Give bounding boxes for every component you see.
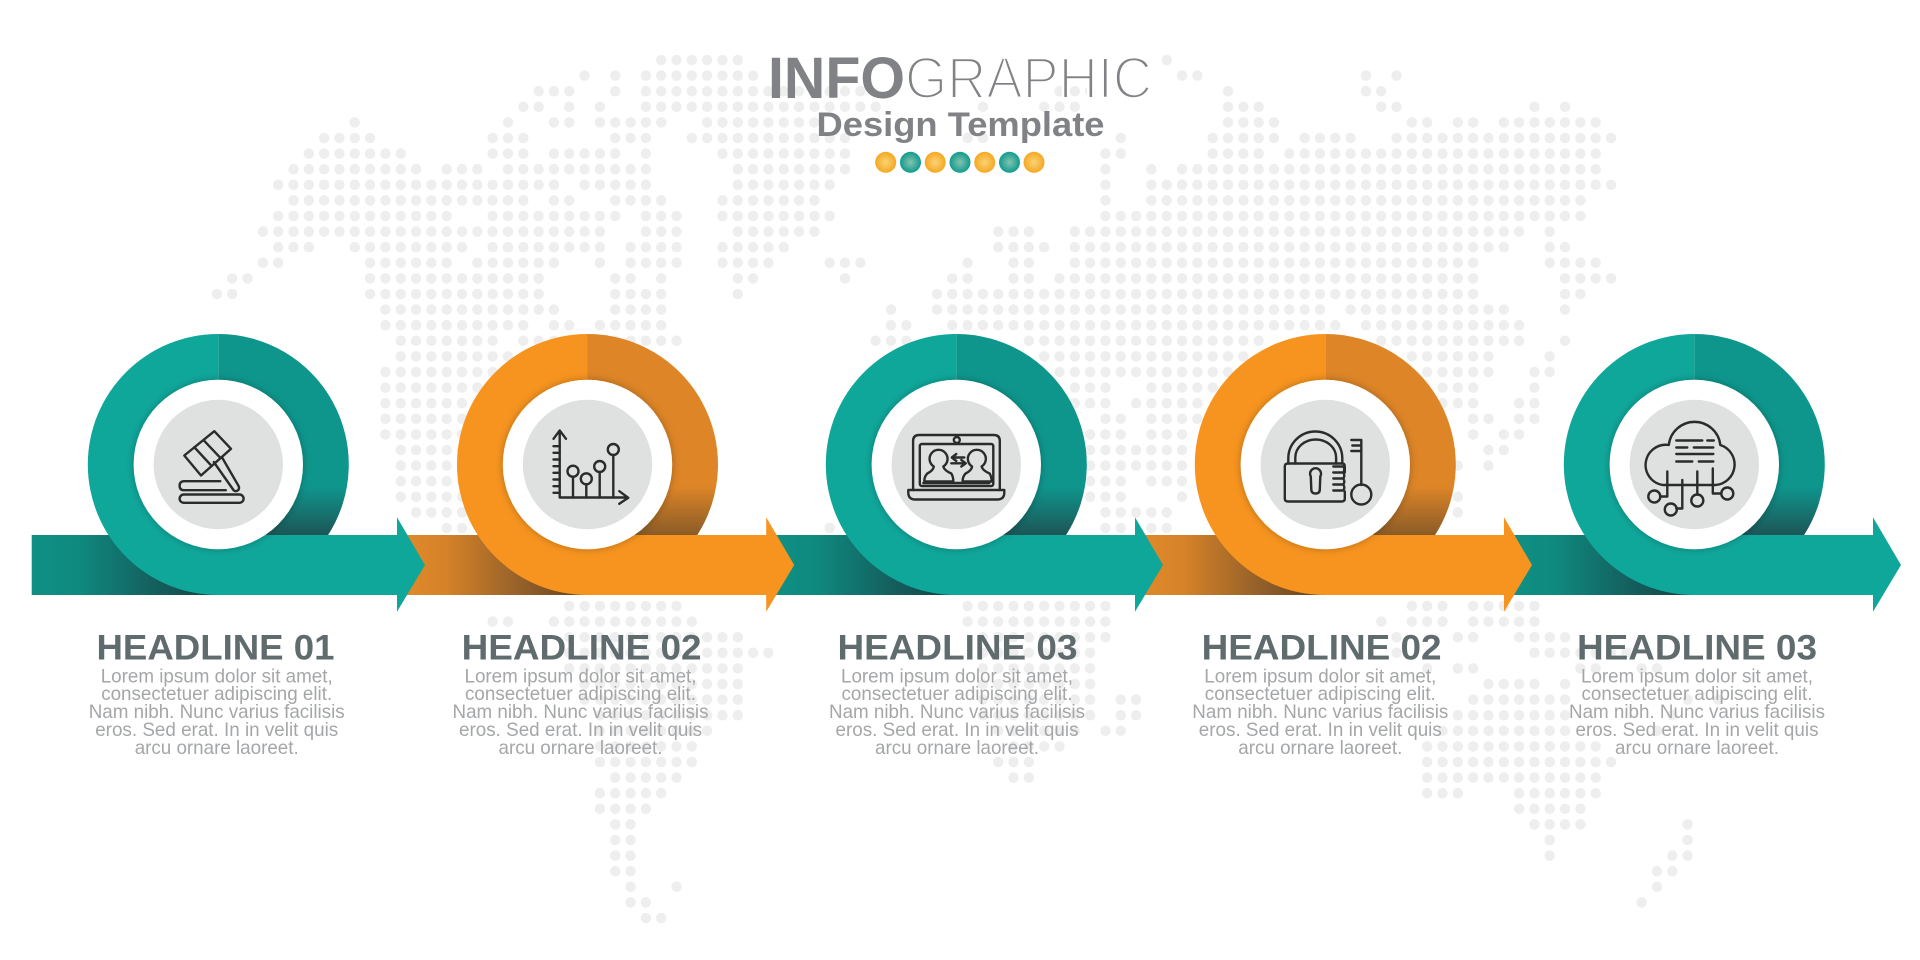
step 1 text: consectetuer adipiscing elit. — [101, 683, 332, 705]
step 1 text: Nam nibh. Nunc varius facilisis — [89, 701, 345, 723]
step 1 text: eros. Sed erat. In in velit quis — [95, 719, 338, 741]
step 4: orange ring with padlock icon — [1137, 334, 1532, 612]
step 2 text: Lorem ipsum dolor sit amet, — [464, 665, 696, 687]
step 4 text: consectetuer adipiscing elit. — [1205, 683, 1436, 705]
step 2 text — [452, 627, 709, 759]
dotted world map background — [217, 60, 1718, 918]
step 4 text: Lorem ipsum dolor sit amet, — [1204, 665, 1436, 687]
step 4 text: arcu ornare laoreet. — [1238, 737, 1402, 759]
step 2 text: Nam nibh. Nunc varius facilisis — [452, 701, 709, 723]
step 5 text: arcu ornare laoreet. — [1615, 737, 1779, 759]
icon: cloud network — [1646, 422, 1735, 516]
step 3 text: eros. Sed erat. In in velit quis — [836, 719, 1079, 741]
title: INFOGRAPHIC — [768, 46, 1152, 111]
icon: gavel — [180, 431, 244, 503]
step 3 text: HEADLINE 03 — [838, 627, 1078, 667]
step 1 text: Lorem ipsum dolor sit amet, — [101, 665, 333, 687]
step 5 text: eros. Sed erat. In in velit quis — [1576, 719, 1819, 741]
step 3 text — [829, 627, 1085, 759]
subtitle: Design Template: Design Template — [816, 106, 1104, 144]
step 2: orange ring with chart icon — [400, 334, 794, 612]
step 3 text: Nam nibh. Nunc varius facilisis — [829, 701, 1085, 723]
step 3: teal ring with laptop icon — [768, 334, 1163, 612]
step 4 text: HEADLINE 02 — [1202, 627, 1442, 667]
step 5: teal ring with cloud icon — [1506, 334, 1901, 612]
icon: laptop video call — [908, 435, 1004, 500]
step 5 text — [1569, 627, 1825, 759]
step 4 text: Nam nibh. Nunc varius facilisis — [1192, 701, 1449, 723]
step 2 text: HEADLINE 02 — [462, 627, 702, 667]
title: INFOGRAPHIC: INFO — [768, 46, 905, 111]
step 3 text: Lorem ipsum dolor sit amet, — [841, 665, 1073, 687]
step 1 text — [89, 627, 345, 759]
step 2 text: arcu ornare laoreet. — [498, 737, 662, 759]
step 5 text: Nam nibh. Nunc varius facilisis — [1569, 701, 1825, 723]
step 5 text: HEADLINE 03 — [1577, 627, 1817, 667]
step 3 text: consectetuer adipiscing elit. — [842, 683, 1072, 705]
step 2 text: consectetuer adipiscing elit. — [465, 683, 696, 705]
step 1: teal ring with gavel icon — [32, 334, 425, 612]
step 4 text — [1192, 627, 1449, 759]
step 3 text: arcu ornare laoreet. — [875, 737, 1039, 759]
step 2 text: eros. Sed erat. In in velit quis — [459, 719, 702, 741]
icon: padlock and key — [1285, 432, 1371, 504]
step 5 text: Lorem ipsum dolor sit amet, — [1581, 665, 1813, 687]
step 5 text: consectetuer adipiscing elit. — [1582, 683, 1812, 705]
icon: lollipop chart — [554, 430, 628, 504]
title: INFOGRAPHIC: GRAPHIC — [905, 46, 1152, 111]
step 1 text: arcu ornare laoreet. — [135, 737, 299, 759]
decorative row of seven balls — [875, 152, 1044, 173]
step 4 text: eros. Sed erat. In in velit quis — [1199, 719, 1442, 741]
step 1 text: HEADLINE 01 — [96, 627, 334, 667]
